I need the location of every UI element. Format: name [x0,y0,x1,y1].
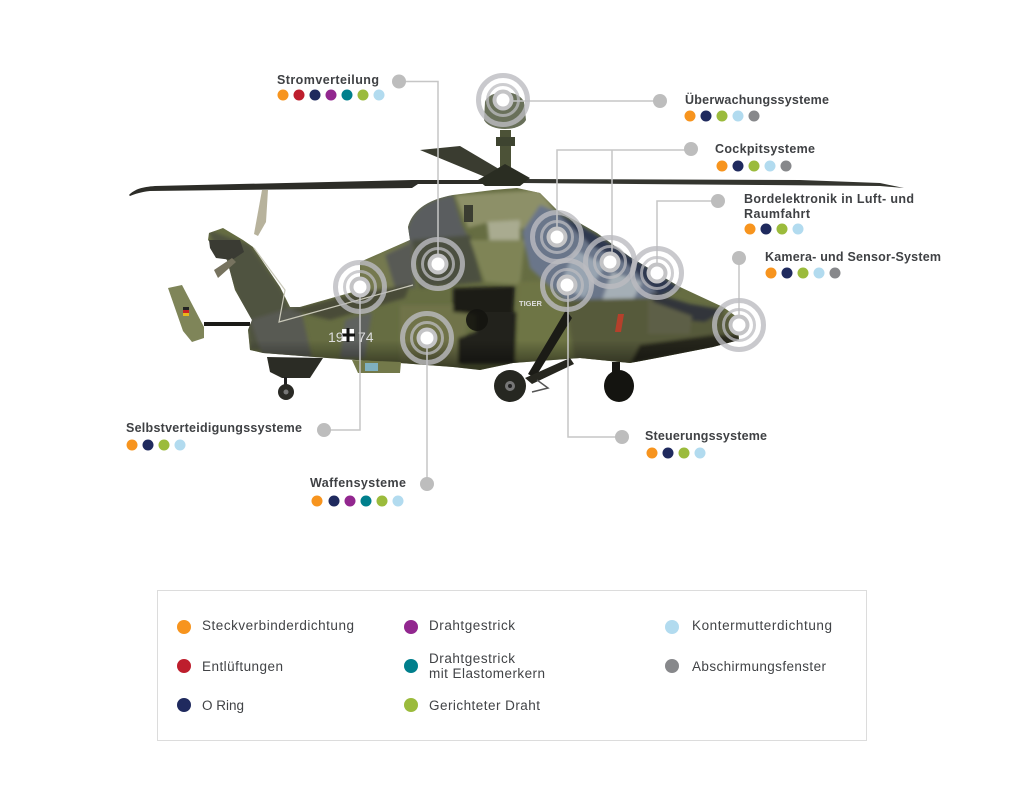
right main rotor blade [520,179,904,188]
leader line: Waffensysteme [426,338,428,484]
legend item: Drahtgestrick: Drahtgestrick [429,618,515,633]
callout: Waffensysteme [310,476,434,506]
target ring: Waffen [402,314,452,362]
underside box [352,360,401,373]
legend item: Kontermutterdichtung: Kontermutterdichtung [692,618,832,633]
callout: Kamera- und Sensor-System [732,250,941,278]
rear main rotor blade [420,146,504,179]
leader line: Bordelektronik [657,201,718,272]
tail wheel [278,377,294,400]
legend item: Drahtgestrick mit Elastomerkern: mit Elastomerkern [429,666,545,681]
aircraft name: TIGER [519,299,543,308]
landing gear [494,310,634,402]
left main rotor blade [129,180,490,196]
callout: Selbstverteidigungssysteme [126,421,331,450]
legend item: Gerichteter Draht: Gerichteter Draht [429,698,540,713]
fuselage [208,188,739,370]
shadow under stub wing [453,286,515,318]
callout: Bordelektronik: Raumfahrt [744,207,811,221]
target ring: Cockpit 2 [586,238,634,286]
leader line: Überwachungssysteme [503,100,660,102]
legend item: Steckverbinderdichtung: Steckverbinderdichtung [202,618,354,633]
callout: Bordelektronik [711,192,914,234]
callout: Waffensysteme: Waffensysteme [310,476,406,490]
canopy [522,205,668,306]
callout: Bordelektronik: Bordelektronik in Luft- und [744,192,914,206]
tail boom dark camo [208,230,290,350]
target ring: Selbstverteidigung [336,262,384,312]
tail rotor gearbox [209,240,244,278]
small window [464,205,473,222]
tail drive shaft cover [254,248,413,322]
callout: Steuerungssysteme [615,429,767,458]
iron cross marking: 19 [328,329,344,345]
legend item: Abschirmungsfenster: Abschirmungsfenster [692,659,826,674]
callout: Überwachungssysteme [653,92,829,122]
tail fin [168,285,250,342]
callout: Cockpitsysteme: Cockpitsysteme [715,142,815,156]
engine cowling [406,195,467,243]
mast and sight [478,92,530,186]
iron cross marking [328,328,374,345]
legend panel [158,590,866,740]
legend item: Drahtgestrick mit Elastomerkern [404,651,545,681]
target ring: Kamera [714,300,764,350]
callout: Stromverteilung [277,73,406,100]
tail rotor blade [254,190,268,236]
helicopter illustration [129,92,904,402]
leader line: Stromverteilung [399,82,438,262]
callout: Selbstverteidigungssysteme: Selbstverteidigungssysteme [126,421,302,435]
leader line: Steuerung [568,285,622,437]
rocket pod [466,309,488,331]
callout: Überwachungssysteme: Überwachungssysteme [685,92,829,107]
target ring: Bordelektronik [632,248,682,298]
target ring: Steuerung [542,260,592,310]
iron cross marking: 74 [358,329,374,345]
ventral fin [267,357,323,378]
target ring: Stromverteilung [414,240,462,288]
underside shading [250,344,704,370]
leader line: Kamera [738,258,740,325]
nose [565,298,740,364]
legend item: Drahtgestrick mit Elastomerkern: Drahtgestrick [429,651,515,666]
target ring: Überwachung [478,76,528,124]
legend item: O Ring [177,698,244,713]
callout: Steuerungssysteme: Steuerungssysteme [645,429,767,443]
callout: Cockpitsysteme [684,142,815,172]
red intake marking [615,314,624,332]
leader line: Cockpitsysteme [557,150,691,262]
leader line: Selbstverteidigung [324,287,360,430]
legend item: Entlüftungen: Entlüftungen [202,659,283,674]
legend item: O Ring: O Ring [202,698,244,713]
callout: Stromverteilung: Stromverteilung [277,73,379,87]
target ring: Cockpit 1 [532,212,582,262]
callout: Kamera- und Sensor-System: Kamera- und Sensor-System [765,250,941,264]
